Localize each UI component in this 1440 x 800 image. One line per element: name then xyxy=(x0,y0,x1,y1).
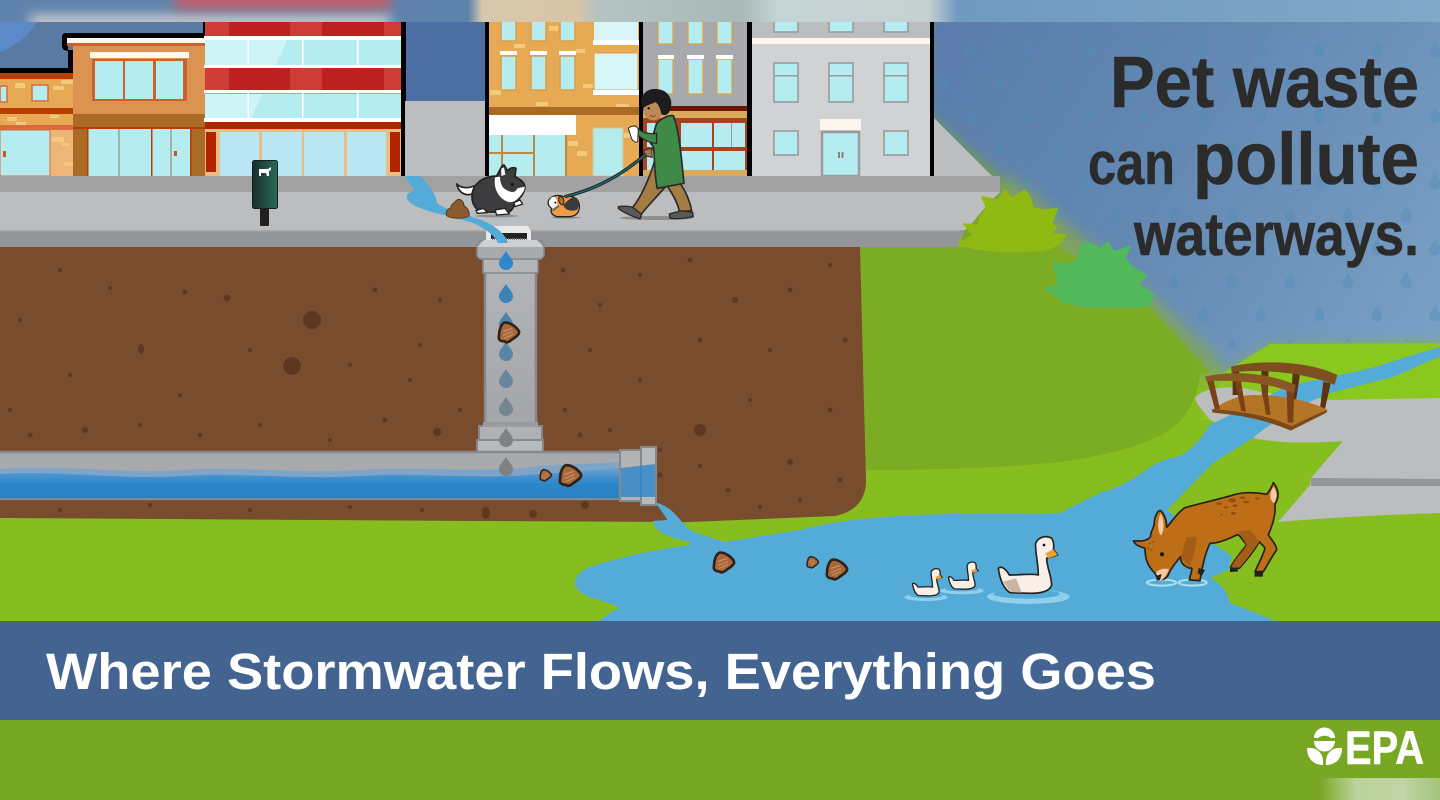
building: grey brick xyxy=(643,21,752,176)
wooden footbridge xyxy=(1205,362,1337,431)
mother swan xyxy=(987,537,1070,604)
storm drain grate xyxy=(478,226,543,247)
blurred bottom patch xyxy=(1320,778,1440,800)
building: orange, far left xyxy=(0,68,73,176)
bush: green xyxy=(1045,242,1153,307)
soil underground xyxy=(0,247,866,522)
background: lawn xyxy=(0,240,1440,640)
blurred top band xyxy=(0,0,1440,22)
stormwater drops falling through pipe xyxy=(499,251,513,476)
deer drinking xyxy=(1133,483,1278,586)
darker lawn hill xyxy=(860,247,1210,470)
EPA logo xyxy=(1307,721,1424,774)
heading: pet waste can pollute waterways: Pet waste xyxy=(1110,43,1419,123)
building: light grey xyxy=(752,21,934,176)
heading: pet waste can pollute waterways xyxy=(1088,43,1419,268)
heading: pet waste can pollute waterways: can xyxy=(1088,130,1175,197)
grey back wall between buildings xyxy=(405,101,485,177)
pet waste in pond 3 xyxy=(827,560,847,579)
black and white dog xyxy=(457,165,525,217)
EPA wordmark: EPA xyxy=(1345,721,1424,774)
lower lawn band xyxy=(0,720,1440,800)
stream and pond xyxy=(575,347,1440,621)
heading: pet waste can pollute waterways: pollute xyxy=(1193,119,1419,200)
building: tan two storey xyxy=(62,22,207,176)
banner xyxy=(0,621,1440,720)
pet waste in pipe large xyxy=(560,465,581,486)
runoff on sidewalk xyxy=(405,176,508,243)
pet waste in pipe small xyxy=(540,470,552,481)
banner title: Where Stormwater Flows, Everything Goes xyxy=(46,643,1156,700)
sky left of buildings xyxy=(0,20,490,105)
horizontal pipe xyxy=(0,447,656,505)
small orange and white dog xyxy=(548,195,581,219)
building: orange brick xyxy=(485,21,643,176)
grey footpath xyxy=(1195,387,1440,522)
leash xyxy=(565,154,646,197)
bush: olive xyxy=(958,190,1066,252)
duckling 2 xyxy=(940,562,984,594)
storm drain vertical pipe xyxy=(477,241,544,452)
pet waste on sidewalk xyxy=(446,199,469,218)
sky and rain, right side xyxy=(925,10,1440,376)
sidewalk xyxy=(0,118,1000,247)
building: red and glass xyxy=(204,22,406,176)
duckling 1 xyxy=(904,569,948,601)
pet waste in pond 1 xyxy=(714,552,734,572)
pet waste in pond 2 xyxy=(807,557,819,568)
bright lawn behind bridge xyxy=(1200,343,1440,420)
pet waste in shaft xyxy=(499,322,519,342)
person walking dogs holding bag xyxy=(618,90,693,220)
pet waste bin xyxy=(252,160,278,226)
